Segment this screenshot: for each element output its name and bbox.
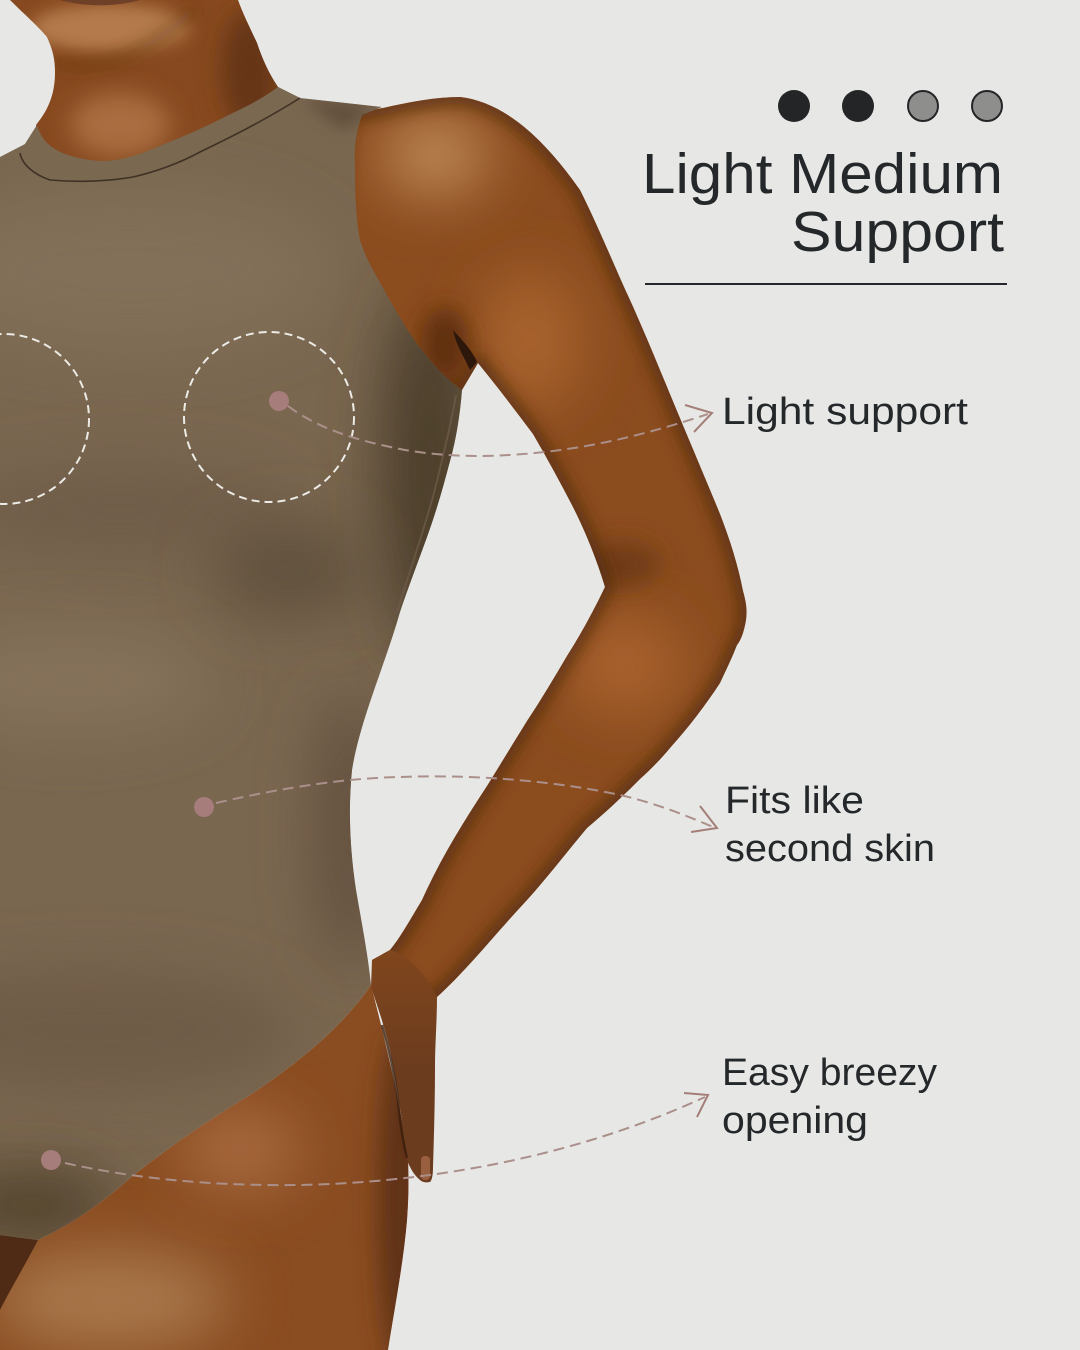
bodysuit [0, 87, 462, 1240]
model figure [0, 0, 760, 1350]
title: Support [791, 200, 1004, 264]
callout: easy breezy opening: opening [722, 1100, 868, 1142]
left cup dashed circle [0, 334, 89, 504]
callout: light support: Light support [722, 391, 968, 433]
bodysuit shading [0, 98, 480, 1240]
callout: fits like second skin: second skin [725, 828, 935, 870]
shoulder shadow [306, 98, 375, 130]
right cup dashed circle [184, 332, 354, 502]
callout: easy breezy opening [41, 1052, 937, 1185]
title: Light Medium [642, 142, 1003, 206]
neck and chin [10, 0, 278, 161]
collar seam [20, 98, 300, 181]
callout: easy breezy opening: Easy breezy [722, 1052, 937, 1094]
title [642, 142, 1004, 264]
support level dots [778, 90, 1002, 122]
hand shadow edge [382, 1025, 407, 1158]
arm [354, 97, 747, 997]
callout: fits like second skin: Fits like [725, 780, 864, 822]
callout: light support [269, 391, 968, 456]
inner thigh shadow [0, 1235, 38, 1310]
leg [0, 985, 408, 1350]
armpit shadow [453, 330, 477, 370]
fingernail [421, 1156, 430, 1180]
collar [20, 87, 300, 181]
callout: fits like second skin [194, 776, 935, 870]
title rule [645, 283, 1007, 285]
hand [371, 950, 437, 1182]
side seam [397, 395, 456, 612]
